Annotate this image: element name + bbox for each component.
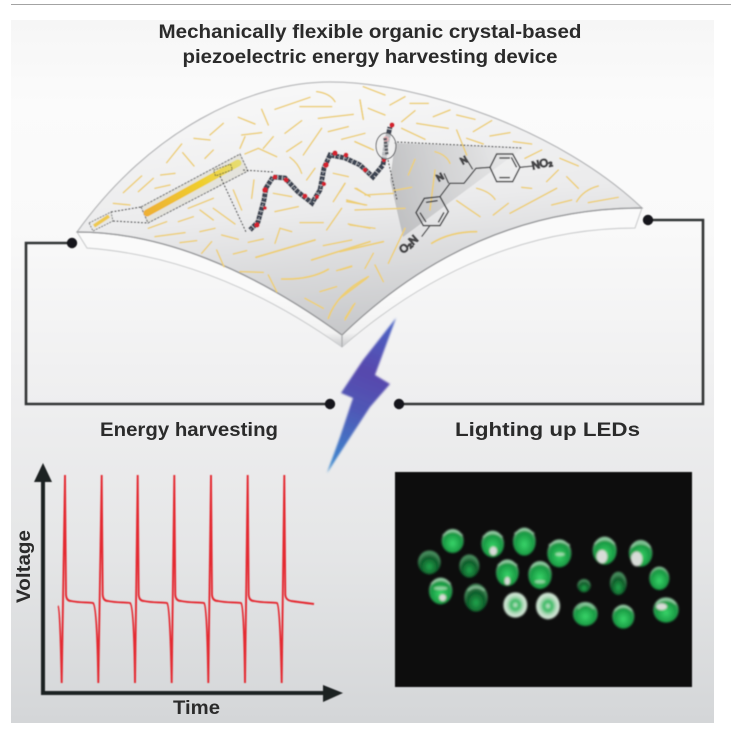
y axis label: Voltage (13, 530, 35, 603)
O2N label: O₂N (397, 233, 421, 256)
sheet front edge (77, 208, 642, 335)
heading: energy harvesting: Energy harvesting (100, 419, 278, 441)
photo background (395, 472, 692, 687)
organic crystal fibers, right part (340, 87, 618, 318)
title: piezoelectric energy harvesting device (182, 46, 558, 68)
icon: lightning bolt (327, 318, 396, 473)
molecule highlight wedge (390, 143, 523, 237)
ring contents (385, 138, 387, 155)
sheet thickness (77, 208, 642, 347)
large crystal rod (141, 154, 248, 223)
molecular chain (250, 122, 395, 230)
N atom labels: N (459, 154, 470, 166)
N atom labels: N (435, 171, 446, 183)
linker bonds (422, 159, 533, 237)
N atom labels (435, 154, 470, 183)
voltage-time chart (13, 463, 343, 719)
aryl ring lower (416, 197, 448, 226)
circuit wire left (26, 238, 335, 409)
title: Mechanically flexible organic crystal-based (158, 21, 582, 43)
chemical structure (397, 154, 554, 256)
organic crystal fibers, left part (113, 92, 370, 320)
zoom guide dotted lines (111, 142, 522, 232)
voltage trace (58, 475, 314, 683)
magnified ring on chain (376, 133, 396, 159)
title (158, 21, 582, 68)
sheet top surface (77, 82, 642, 335)
x axis label: Time (173, 697, 220, 719)
tip edge (341, 335, 343, 347)
small crystal inset (89, 212, 113, 231)
flexible device sheet (77, 82, 642, 347)
circuit wire right (394, 215, 703, 409)
NO2 label: NO₂ (531, 156, 554, 172)
aryl ring upper (490, 154, 520, 182)
axes (34, 463, 343, 702)
top rule (11, 4, 731, 5)
photo: lit green LEDs (395, 472, 692, 687)
heading: lighting up LEDs: Lighting up LEDs (455, 419, 640, 441)
LED array (418, 528, 679, 629)
